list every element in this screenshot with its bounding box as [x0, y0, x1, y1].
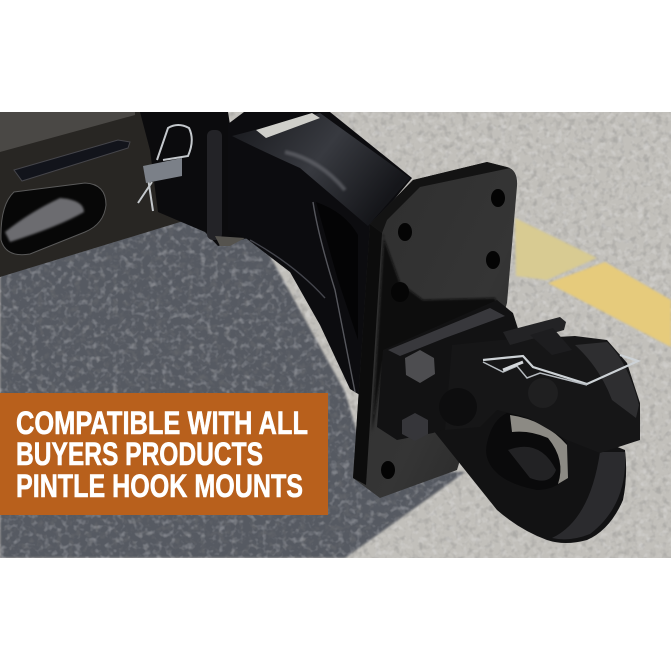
arm top surface — [232, 113, 410, 226]
caption text: COMPATIBLE WITH ALL — [16, 405, 308, 441]
pin and latch — [503, 317, 566, 345]
caption text: PINTLE HOOK MOUNTS — [16, 468, 303, 504]
dark shadow on plate — [372, 233, 500, 432]
infographic canvas — [0, 112, 671, 558]
orange caption banner — [0, 393, 328, 515]
caption text: BUYERS PRODUCTS — [16, 436, 263, 472]
pavement seen through slot — [5, 198, 84, 242]
pavement texture — [0, 112, 671, 558]
arm highlight — [285, 152, 345, 190]
pavement: sunlit concrete — [0, 112, 671, 558]
plate bolt holes — [491, 189, 505, 207]
hook ring — [433, 400, 626, 543]
arm label sticker — [256, 113, 320, 138]
arm side curve lines — [313, 202, 355, 392]
pintle mount arm — [228, 112, 412, 400]
light through opening — [510, 415, 568, 484]
receiver tube — [140, 112, 248, 246]
oval slot showing pavement — [1, 183, 106, 255]
latch head and body — [502, 336, 640, 453]
rear bumper of truck — [0, 112, 181, 277]
yellow parking line — [515, 218, 671, 347]
cotter clip — [483, 355, 638, 384]
hitch pin and clip — [138, 125, 192, 211]
mounting plate — [353, 162, 517, 498]
photo: pintle hook on pavement — [0, 112, 671, 558]
hook bolts — [405, 350, 435, 383]
arm inner slot — [316, 202, 358, 340]
caption text — [16, 405, 308, 504]
pintle hook — [377, 300, 640, 543]
top rim — [370, 162, 510, 233]
upper slot — [14, 140, 130, 181]
pavement: shaded asphalt — [0, 220, 465, 558]
hook base block — [377, 300, 520, 440]
hook opening — [486, 413, 567, 490]
left flange — [353, 224, 382, 485]
